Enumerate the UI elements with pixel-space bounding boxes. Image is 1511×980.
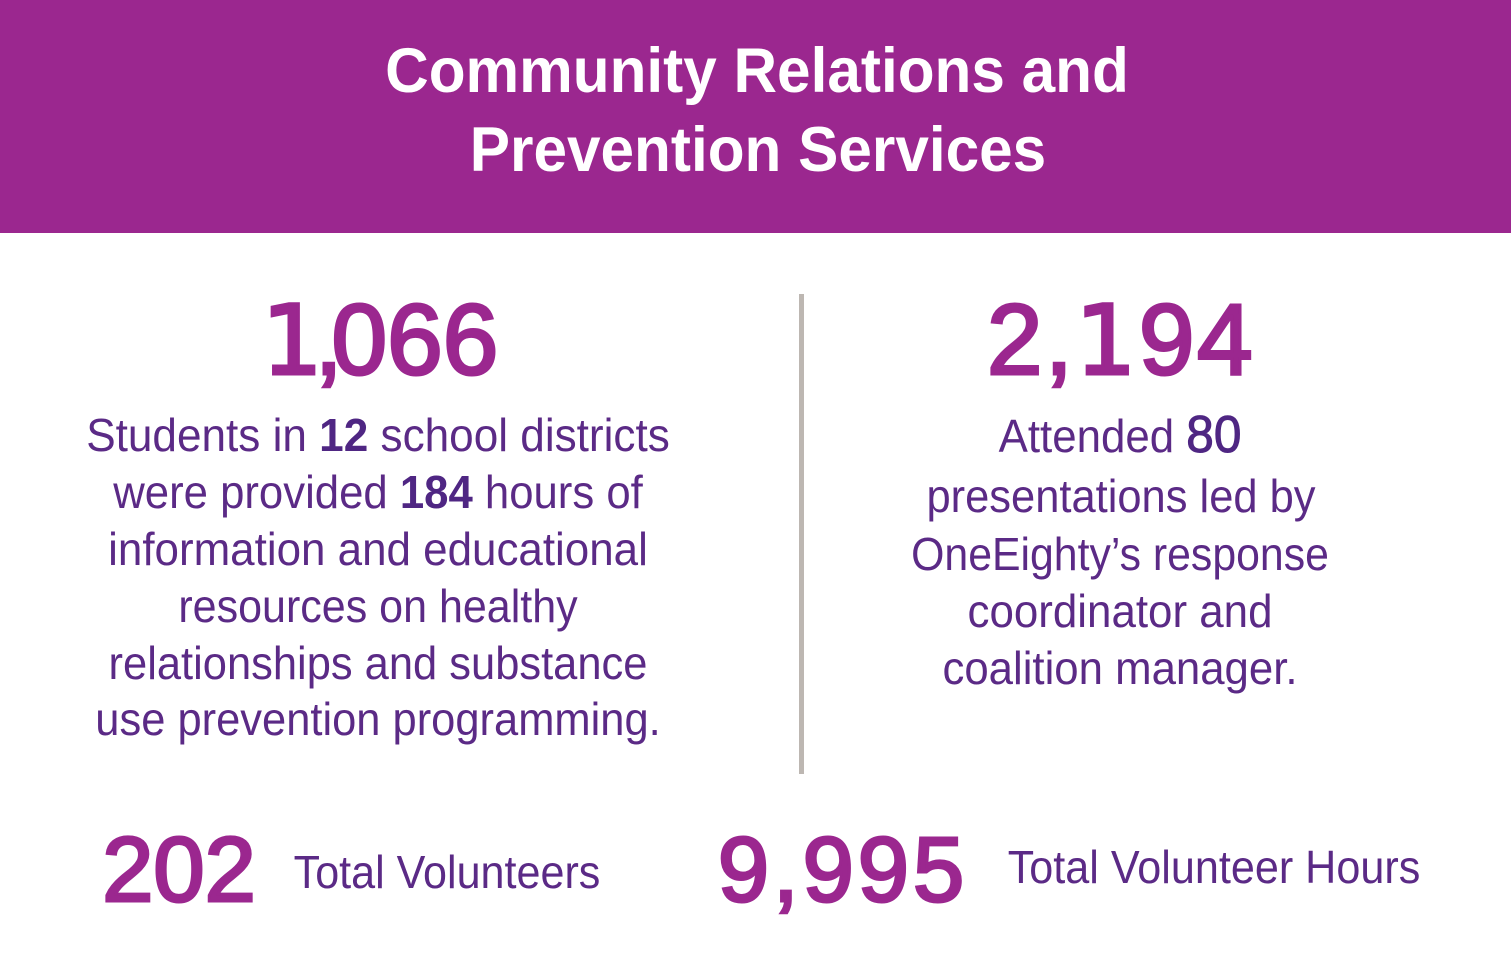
title [385,36,1129,185]
text block: students description [86,409,670,745]
statistic: 9,995: 9,995 [718,819,968,921]
statistic: 2,194: 2,194 [987,284,1255,397]
text block: students description: use prevention programming. [95,693,661,745]
text block: students description: relationships and substance [109,637,647,689]
text block: students description: information and educational [108,523,648,575]
label: total volunteer hours: Total Volunteer Hours [1008,841,1420,893]
title: Community Relations and [385,36,1129,106]
title: Prevention Services [470,115,1046,185]
text block: students description: Students in 12 school districts [86,409,670,461]
text block: attendees description [911,406,1329,694]
text block: attendees description: OneEighty’s response [911,528,1329,580]
text block: attendees description: presentations led by [926,470,1316,522]
header banner [0,0,1511,233]
text block: attendees description: coordinator and [968,585,1272,637]
vertical divider [799,294,804,774]
text block: attendees description: Attended 80 [999,406,1241,464]
text block: students description: resources on healthy [178,580,578,632]
text block: students description: were provided 184 hours of [113,466,643,518]
statistic: 1,066: 1,066 [262,284,498,397]
label: total volunteers: Total Volunteers [294,846,600,898]
text block: attendees description: coalition manager. [942,642,1298,694]
statistic: 202: 202 [102,819,256,921]
